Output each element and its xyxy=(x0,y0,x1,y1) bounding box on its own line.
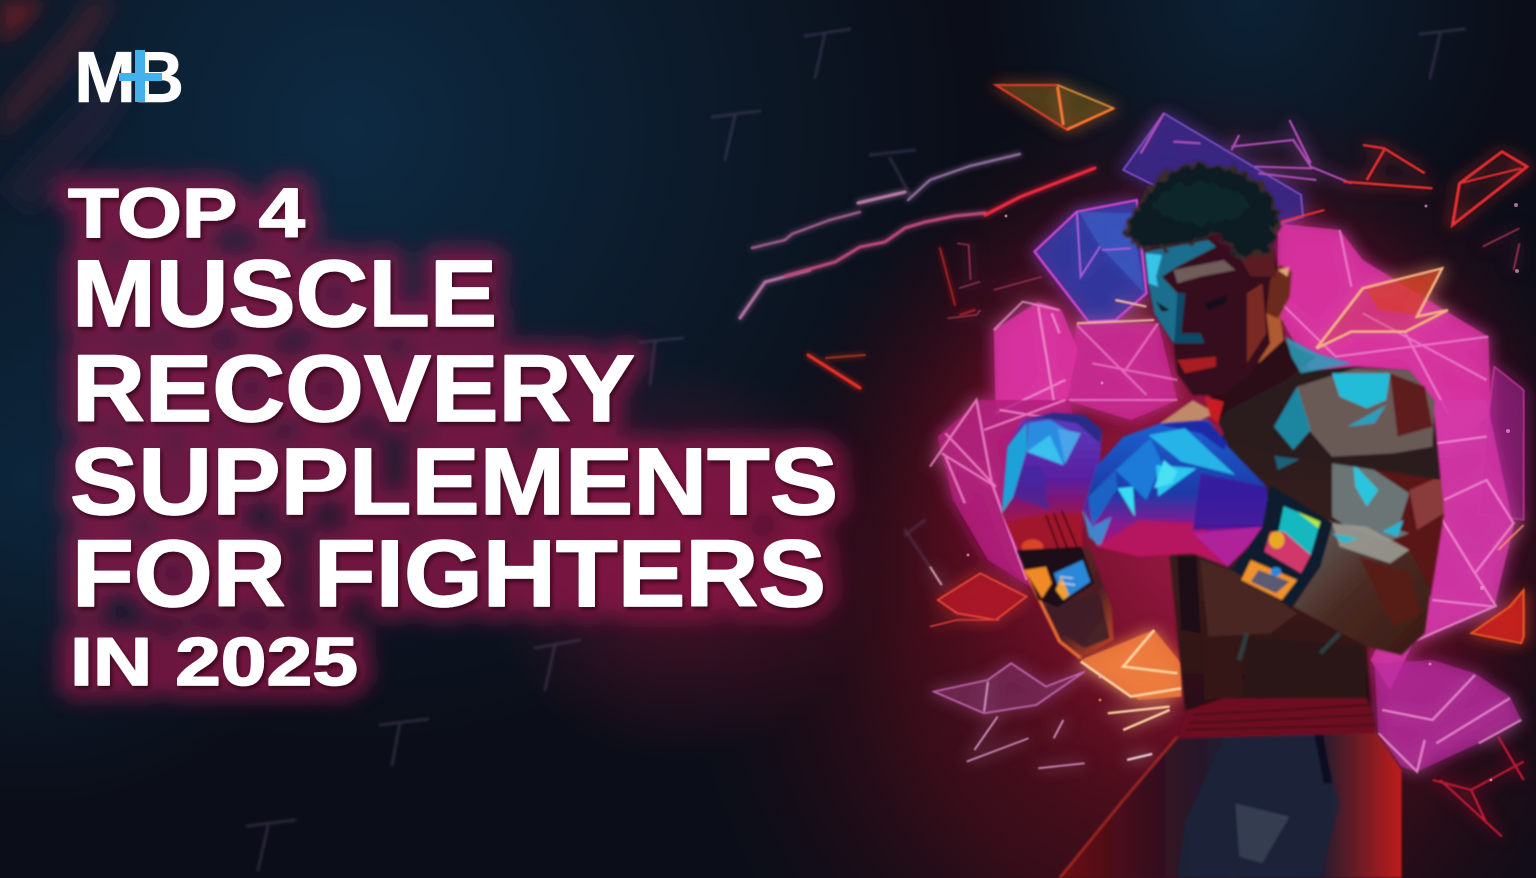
crystal: far-right violet xyxy=(1479,367,1524,520)
crystal: purple xyxy=(1123,113,1351,233)
wrist band xyxy=(1231,485,1333,607)
logo plus xyxy=(119,50,162,102)
logo: B xyxy=(134,38,184,118)
title glow: SUPPLEMENTS xyxy=(70,429,838,535)
forearm right xyxy=(1293,520,1431,655)
crystal: left lower ring xyxy=(930,400,1085,627)
title line: recovery: RECOVERY xyxy=(72,336,635,442)
smoke texture top-left xyxy=(0,0,130,215)
zigzag lines xyxy=(740,154,1095,388)
shoulder xyxy=(1160,367,1440,480)
title line: supplements: SUPPLEMENTS xyxy=(70,429,838,535)
fighter figure xyxy=(1002,163,1444,878)
title glow xyxy=(68,174,838,700)
particles xyxy=(966,203,1519,782)
crystal: blue-violet xyxy=(1034,200,1146,322)
title glow: FOR FIGHTERS xyxy=(72,521,826,627)
crystal: orange shard xyxy=(996,85,1114,130)
waistband xyxy=(1177,698,1374,738)
title line: in 2025: IN 2025 xyxy=(70,624,358,700)
upper arm right xyxy=(1332,400,1444,597)
torso xyxy=(1170,400,1371,710)
crystal: left pink xyxy=(994,302,1078,413)
crystal: center-left pink xyxy=(1065,300,1177,420)
crystal: violet shard lower left xyxy=(934,663,1152,768)
panel: crystal backdrop xyxy=(930,85,1527,837)
title glow: MUSCLE xyxy=(72,241,497,347)
back glove xyxy=(1002,413,1102,560)
title line: muscle: MUSCLE xyxy=(72,241,497,347)
crystal: red outlines top-right xyxy=(947,145,1527,318)
shorts xyxy=(1059,730,1402,878)
head xyxy=(1145,237,1291,395)
title xyxy=(68,174,838,700)
floating shards in background xyxy=(247,29,1465,870)
crystal: right lower ring xyxy=(1371,400,1524,690)
title line: for fighters: FOR FIGHTERS xyxy=(72,521,826,627)
crystal: gold outline xyxy=(1316,268,1448,348)
front glove xyxy=(1083,418,1270,567)
logo: M xyxy=(74,38,136,118)
back cuff xyxy=(1017,547,1094,607)
title line: top 4: TOP 4 xyxy=(68,174,305,252)
neck xyxy=(1204,297,1351,423)
back arm xyxy=(1023,547,1114,659)
title glow: IN 2025 xyxy=(70,624,358,700)
title glow: TOP 4 xyxy=(68,174,305,252)
title glow: RECOVERY xyxy=(72,336,635,442)
crystal: right pink mass xyxy=(1278,223,1490,453)
logo xyxy=(74,38,184,118)
hair xyxy=(1123,163,1278,258)
crystal: bottom right violet xyxy=(1374,660,1524,837)
crystal: orange flare xyxy=(1081,630,1181,730)
